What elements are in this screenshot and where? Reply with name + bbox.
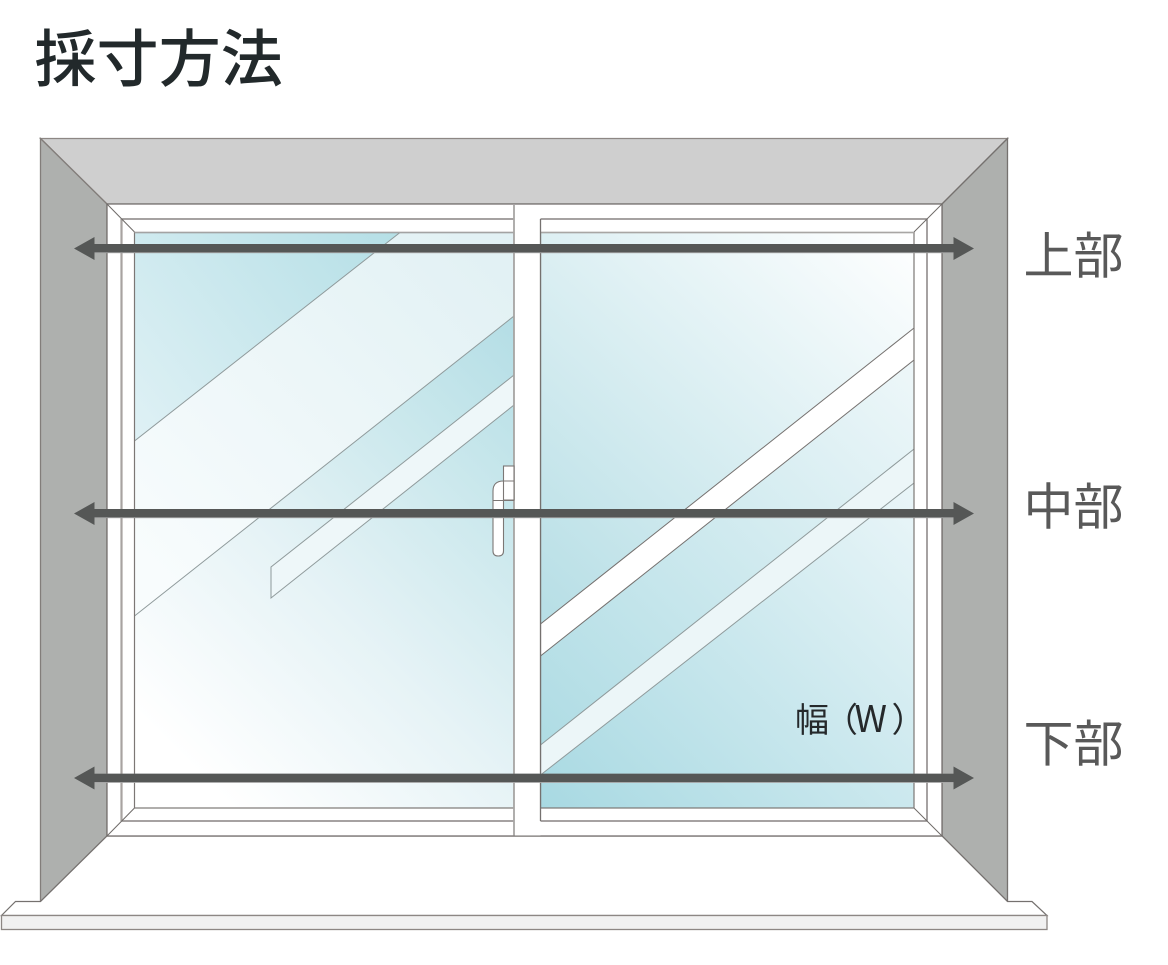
label: bottom: 下部	[1024, 716, 1124, 772]
arrow: bottom width measurement	[74, 766, 974, 790]
title: 採寸方法	[34, 26, 283, 95]
label: middle: 中部	[1024, 480, 1124, 536]
window illustration	[2, 138, 1047, 930]
wall recess: left side	[40, 138, 107, 902]
label: width (W): ）	[892, 693, 926, 742]
wall recess: ceiling	[40, 138, 1008, 204]
label: width (W): 幅	[795, 693, 829, 742]
arrow: middle width measurement	[74, 502, 974, 525]
center mullion	[514, 205, 540, 836]
door handle	[493, 466, 514, 556]
label: width (W): （	[824, 693, 858, 742]
arrow: top width measurement	[74, 237, 974, 260]
label: top: 上部	[1024, 228, 1124, 284]
window frame	[107, 204, 942, 836]
right glass pane	[540, 232, 914, 808]
label: width (W): W	[854, 689, 887, 743]
left glass pane	[134, 232, 514, 808]
wall recess: right side	[942, 138, 1008, 902]
window sill	[2, 836, 1047, 930]
